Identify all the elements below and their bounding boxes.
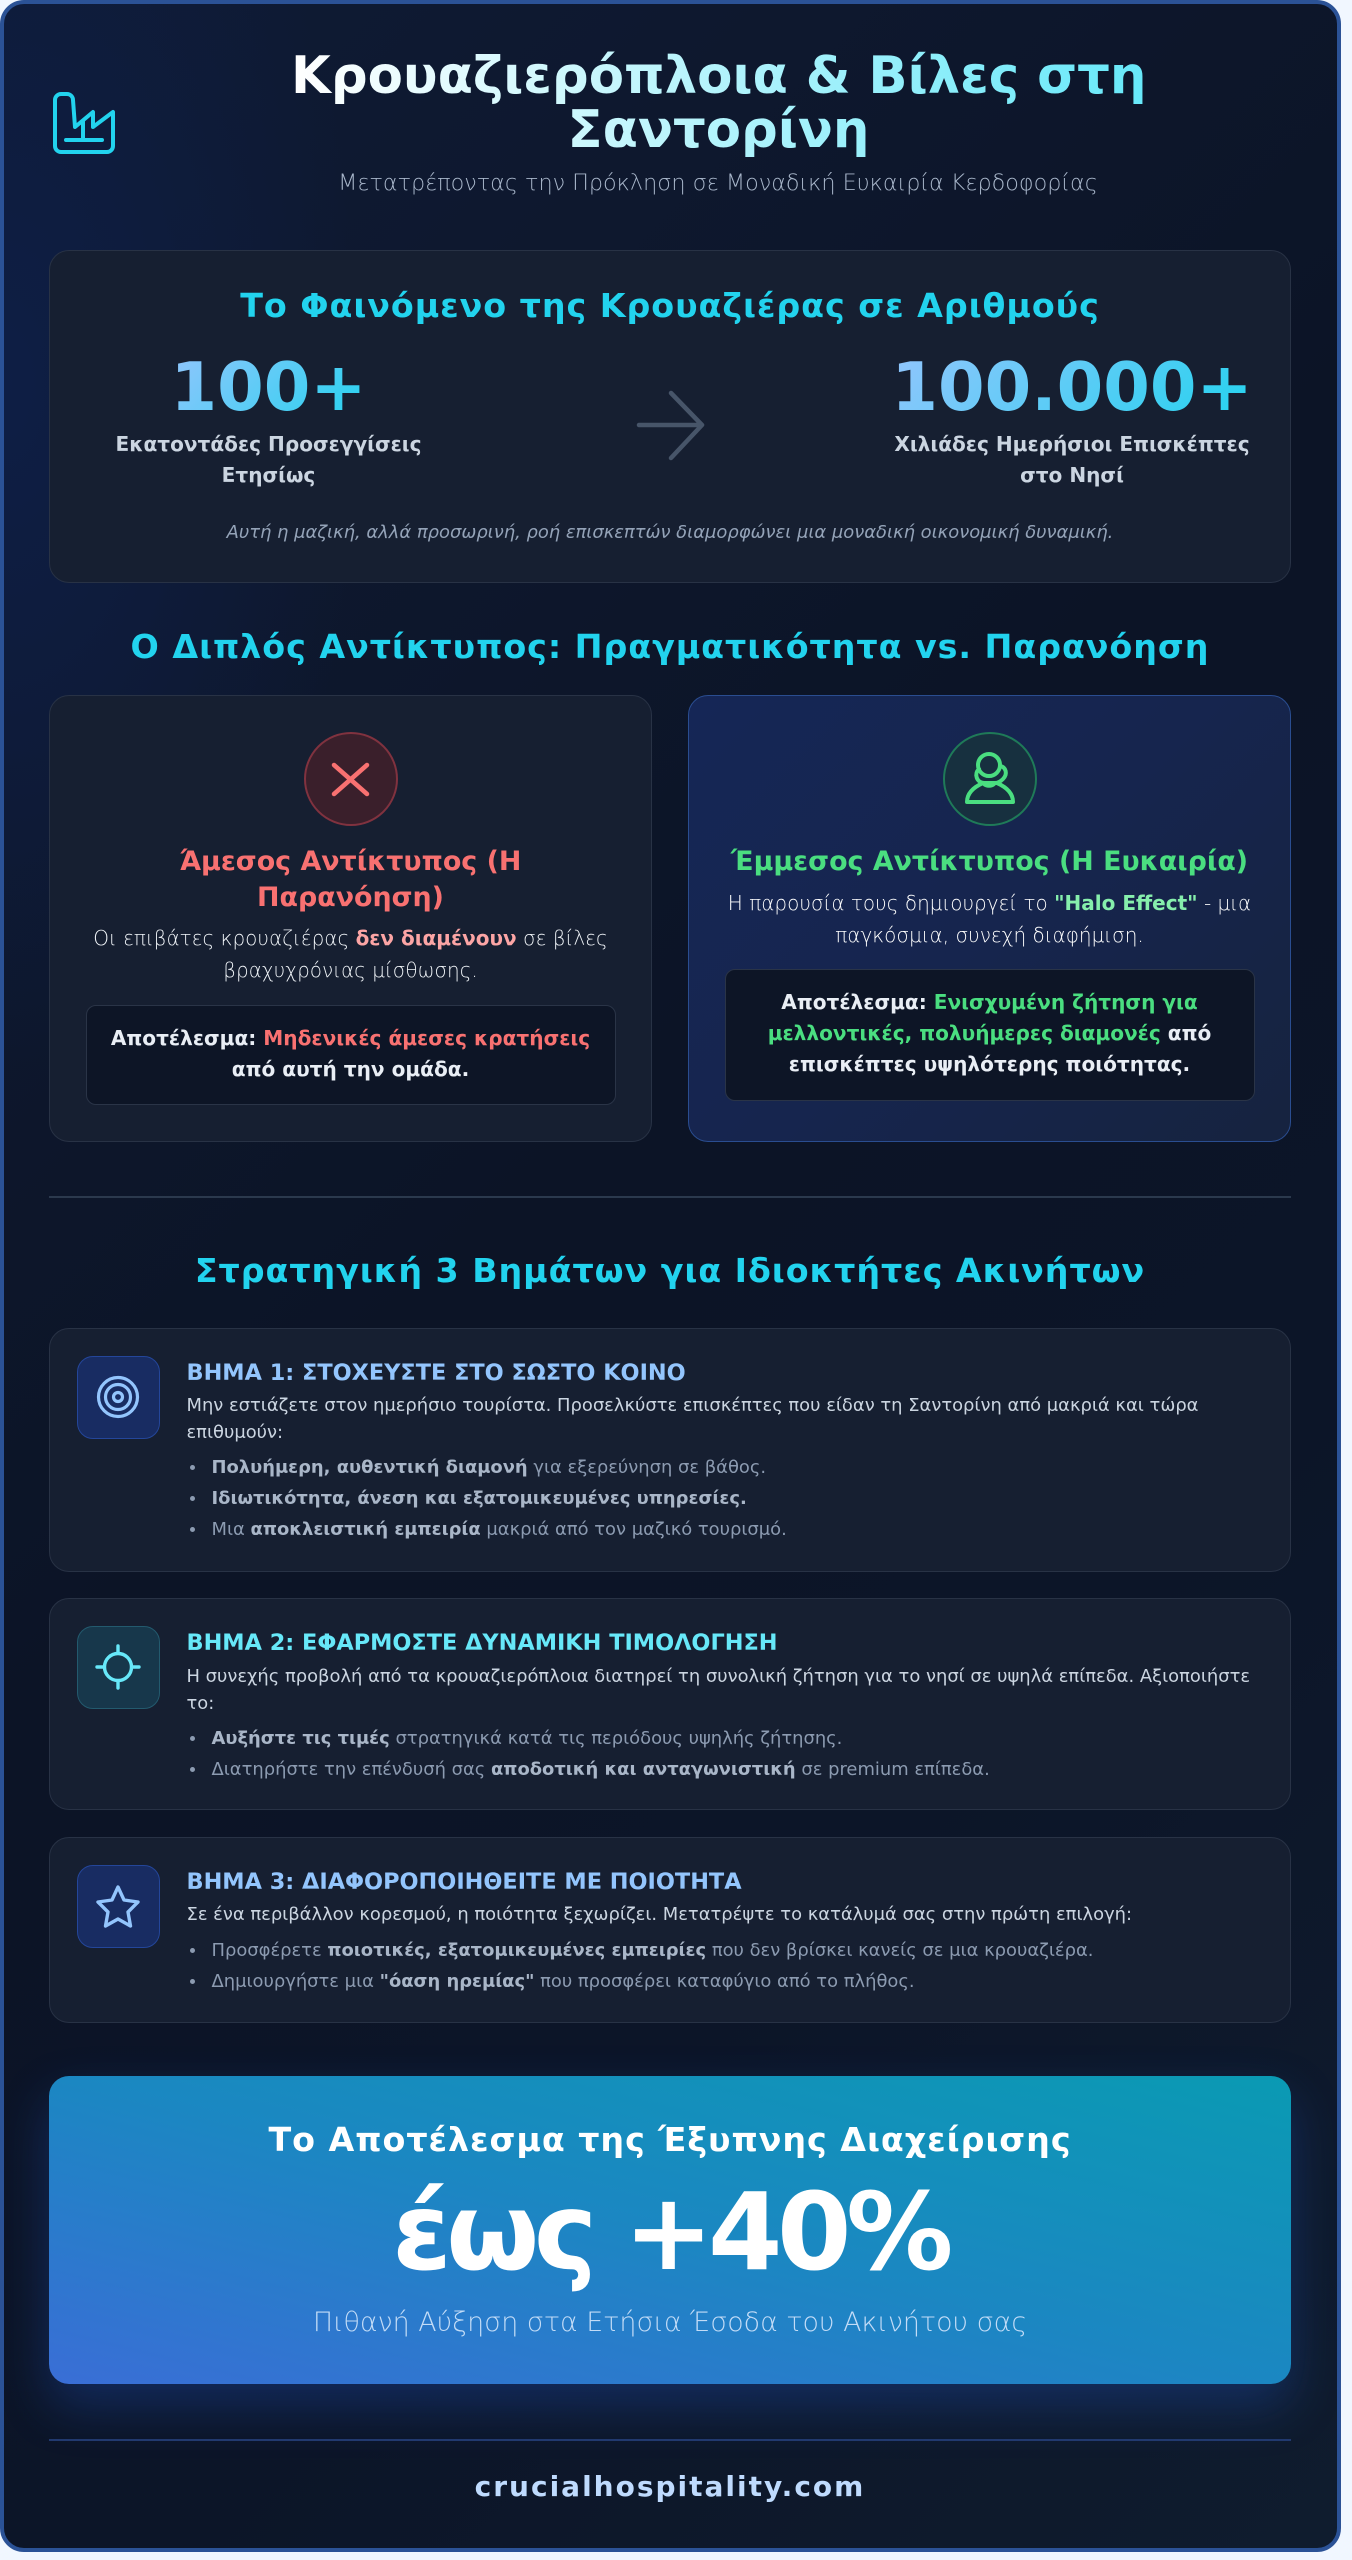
direct result: από αυτή την ομάδα. <box>232 1057 469 1081</box>
stat: 100.000+: Χιλιάδες Ημερήσιοι Επισκέπτες <box>894 432 1250 456</box>
title: Κρουαζιερόπλοια & Βίλες στη <box>291 46 1146 106</box>
title <box>291 48 1146 156</box>
note: Αυτή η μαζική, αλλά προσωρινή, ροή επισκεπτών διαμορφώνει μια μοναδική οικονομική δυναμική. <box>227 522 1113 543</box>
indirect result: επισκέπτες υψηλότερης ποιότητας. <box>789 1052 1190 1076</box>
panel: step 3 <box>49 1837 1291 2023</box>
arrow <box>636 390 704 460</box>
step 3 bullets: Δημιουργήστε μια "όαση ηρεμίας" που προσφέρει καταφύγιο από το πλήθος. <box>212 1971 915 1992</box>
panel: indirect impact <box>688 695 1291 1142</box>
icon: green people <box>943 732 1037 826</box>
stat: 100+: 100+ <box>170 348 366 426</box>
stat: 100.000+: 100.000+ <box>891 348 1253 426</box>
result banner <box>49 2076 1291 2384</box>
header icon: factory <box>53 92 115 154</box>
direct title: Παρανόηση) <box>257 882 444 913</box>
direct result <box>86 1005 616 1105</box>
stat: 100.000+: στο Νησί <box>1020 463 1124 487</box>
indirect text: Η παρουσία τους δημιουργεί το "Halo Effect" - μια <box>728 891 1251 915</box>
indirect result <box>724 969 1254 1101</box>
indirect text: παγκόσμια, συνεχή διαφήμιση. <box>835 923 1144 947</box>
subtitle: Μετατρέποντας την Πρόκληση σε Μοναδική Ευκαιρία Κερδοφορίας <box>338 170 1098 196</box>
step 1 bullets <box>190 1457 787 1540</box>
indirect title: Έμμεσος Αντίκτυπος (Η Ευκαιρία) <box>731 846 1248 877</box>
footer divider <box>49 2439 1291 2441</box>
panel: direct impact <box>49 695 652 1142</box>
step 3 title: ΒΗΜΑ 3: ΔΙΑΦΟΡΟΠΟΙΗΘΕΙΤΕ ΜΕ ΠΟΙΟΤΗΤΑ <box>186 1869 742 1895</box>
step 3 bullets: Προσφέρετε ποιοτικές, εξατομικευμένες εμπειρίες που δεν βρίσκει κανείς σε μια κρουαζιέρα. <box>212 1940 1093 1961</box>
indirect result: Αποτέλεσμα: Ενισχυμένη ζήτηση για <box>781 990 1198 1014</box>
stat: 100+ <box>115 348 422 487</box>
step 2 description <box>186 1666 1250 1714</box>
step 1 description: Μην εστιάζετε στον ημερήσιο τουρίστα. Προσελκύστε επισκέπτες που είδαν τη Σαντορίνη από μακριά και τώρα <box>186 1395 1198 1416</box>
icon: star <box>76 1865 160 1948</box>
direct text <box>93 926 608 982</box>
step 2 description: το: <box>186 1692 214 1714</box>
title: Σαντορίνη <box>568 100 869 160</box>
step 3 description: Σε ένα περιβάλλον κορεσμού, η ποιότητα ξεχωρίζει. Μετατρέψτε το κατάλυμά σας στην πρώτη επιλογή: <box>186 1904 1132 1925</box>
direct title <box>180 846 521 913</box>
divider <box>49 1196 1291 1198</box>
stat: 100+: Εκατοντάδες Προσεγγίσεις <box>115 432 422 456</box>
step 3 bullets <box>190 1940 1093 1992</box>
indirect text <box>728 891 1251 947</box>
icon: target <box>76 1356 160 1439</box>
banner caption: Πιθανή Αύξηση στα Ετήσια Έσοδα του Ακινήτου σας <box>313 2307 1027 2338</box>
panel: step 1 <box>49 1328 1291 1572</box>
step 1 bullets: Πολυήμερη, αυθεντική διαμονή για εξερεύνηση σε βάθος. <box>212 1457 766 1478</box>
icon: red x <box>304 732 398 826</box>
heading: numbers: Το Φαινόμενο της Κρουαζιέρας σε Αριθμούς <box>240 286 1100 325</box>
stat: 100.000+ <box>891 348 1253 487</box>
banner value: έως +40% <box>392 2171 948 2295</box>
panel: step 2 <box>49 1598 1291 1810</box>
direct title: Άμεσος Αντίκτυπος (Η <box>180 846 521 877</box>
direct text: Οι επιβάτες κρουαζιέρας δεν διαμένουν σε βίλες <box>93 926 608 950</box>
step 2 bullets: Αυξήστε τις τιμές στρατηγικά κατά τις περιόδους υψηλής ζήτησης. <box>212 1728 842 1748</box>
direct text: βραχυχρόνιας μίσθωσης. <box>223 958 478 982</box>
indirect result: μελλοντικές, πολυήμερες διαμονές από <box>768 1021 1211 1045</box>
footer: crucialhospitality.com <box>475 2470 865 2503</box>
heading: double impact: Ο Διπλός Αντίκτυπος: Πραγματικότητα vs. Παρανόηση <box>131 627 1209 666</box>
banner heading: Το Αποτέλεσμα της Έξυπνης Διαχείρισης <box>268 2120 1072 2159</box>
step 1 bullets: Μια αποκλειστική εμπειρία μακριά από τον μαζικό τουρισμό. <box>212 1519 787 1540</box>
step 2 description: Η συνεχής προβολή από τα κρουαζιερόπλοια διατηρεί τη συνολική ζήτηση για το νησί σε υψηλά επίπεδα. Αξιοποιήστε <box>186 1666 1250 1686</box>
step 1 description <box>186 1395 1198 1443</box>
panel: cruise numbers <box>49 250 1291 583</box>
direct result: Αποτέλεσμα: Μηδενικές άμεσες κρατήσεις <box>111 1026 590 1050</box>
step 2 title: ΒΗΜΑ 2: ΕΦΑΡΜΟΣΤΕ ΔΥΝΑΜΙΚΗ ΤΙΜΟΛΟΓΗΣΗ <box>186 1630 778 1656</box>
step 2 bullets: Διατηρήστε την επένδυσή σας αποδοτική και ανταγωνιστική σε premium επίπεδα. <box>212 1758 990 1780</box>
step 1 title: ΒΗΜΑ 1: ΣΤΟΧΕΥΣΤΕ ΣΤΟ ΣΩΣΤΟ ΚΟΙΝΟ <box>186 1360 686 1386</box>
step 1 description: επιθυμούν: <box>186 1422 283 1443</box>
stat: 100+: Ετησίως <box>222 463 315 487</box>
step 2 bullets <box>190 1728 990 1780</box>
heading: strategy: Στρατηγική 3 Βημάτων για Ιδιοκτήτες Ακινήτων <box>195 1251 1145 1290</box>
icon: crosshair <box>76 1626 160 1709</box>
step 1 bullets: Ιδιωτικότητα, άνεση και εξατομικευμένες υπηρεσίες. <box>212 1488 747 1509</box>
